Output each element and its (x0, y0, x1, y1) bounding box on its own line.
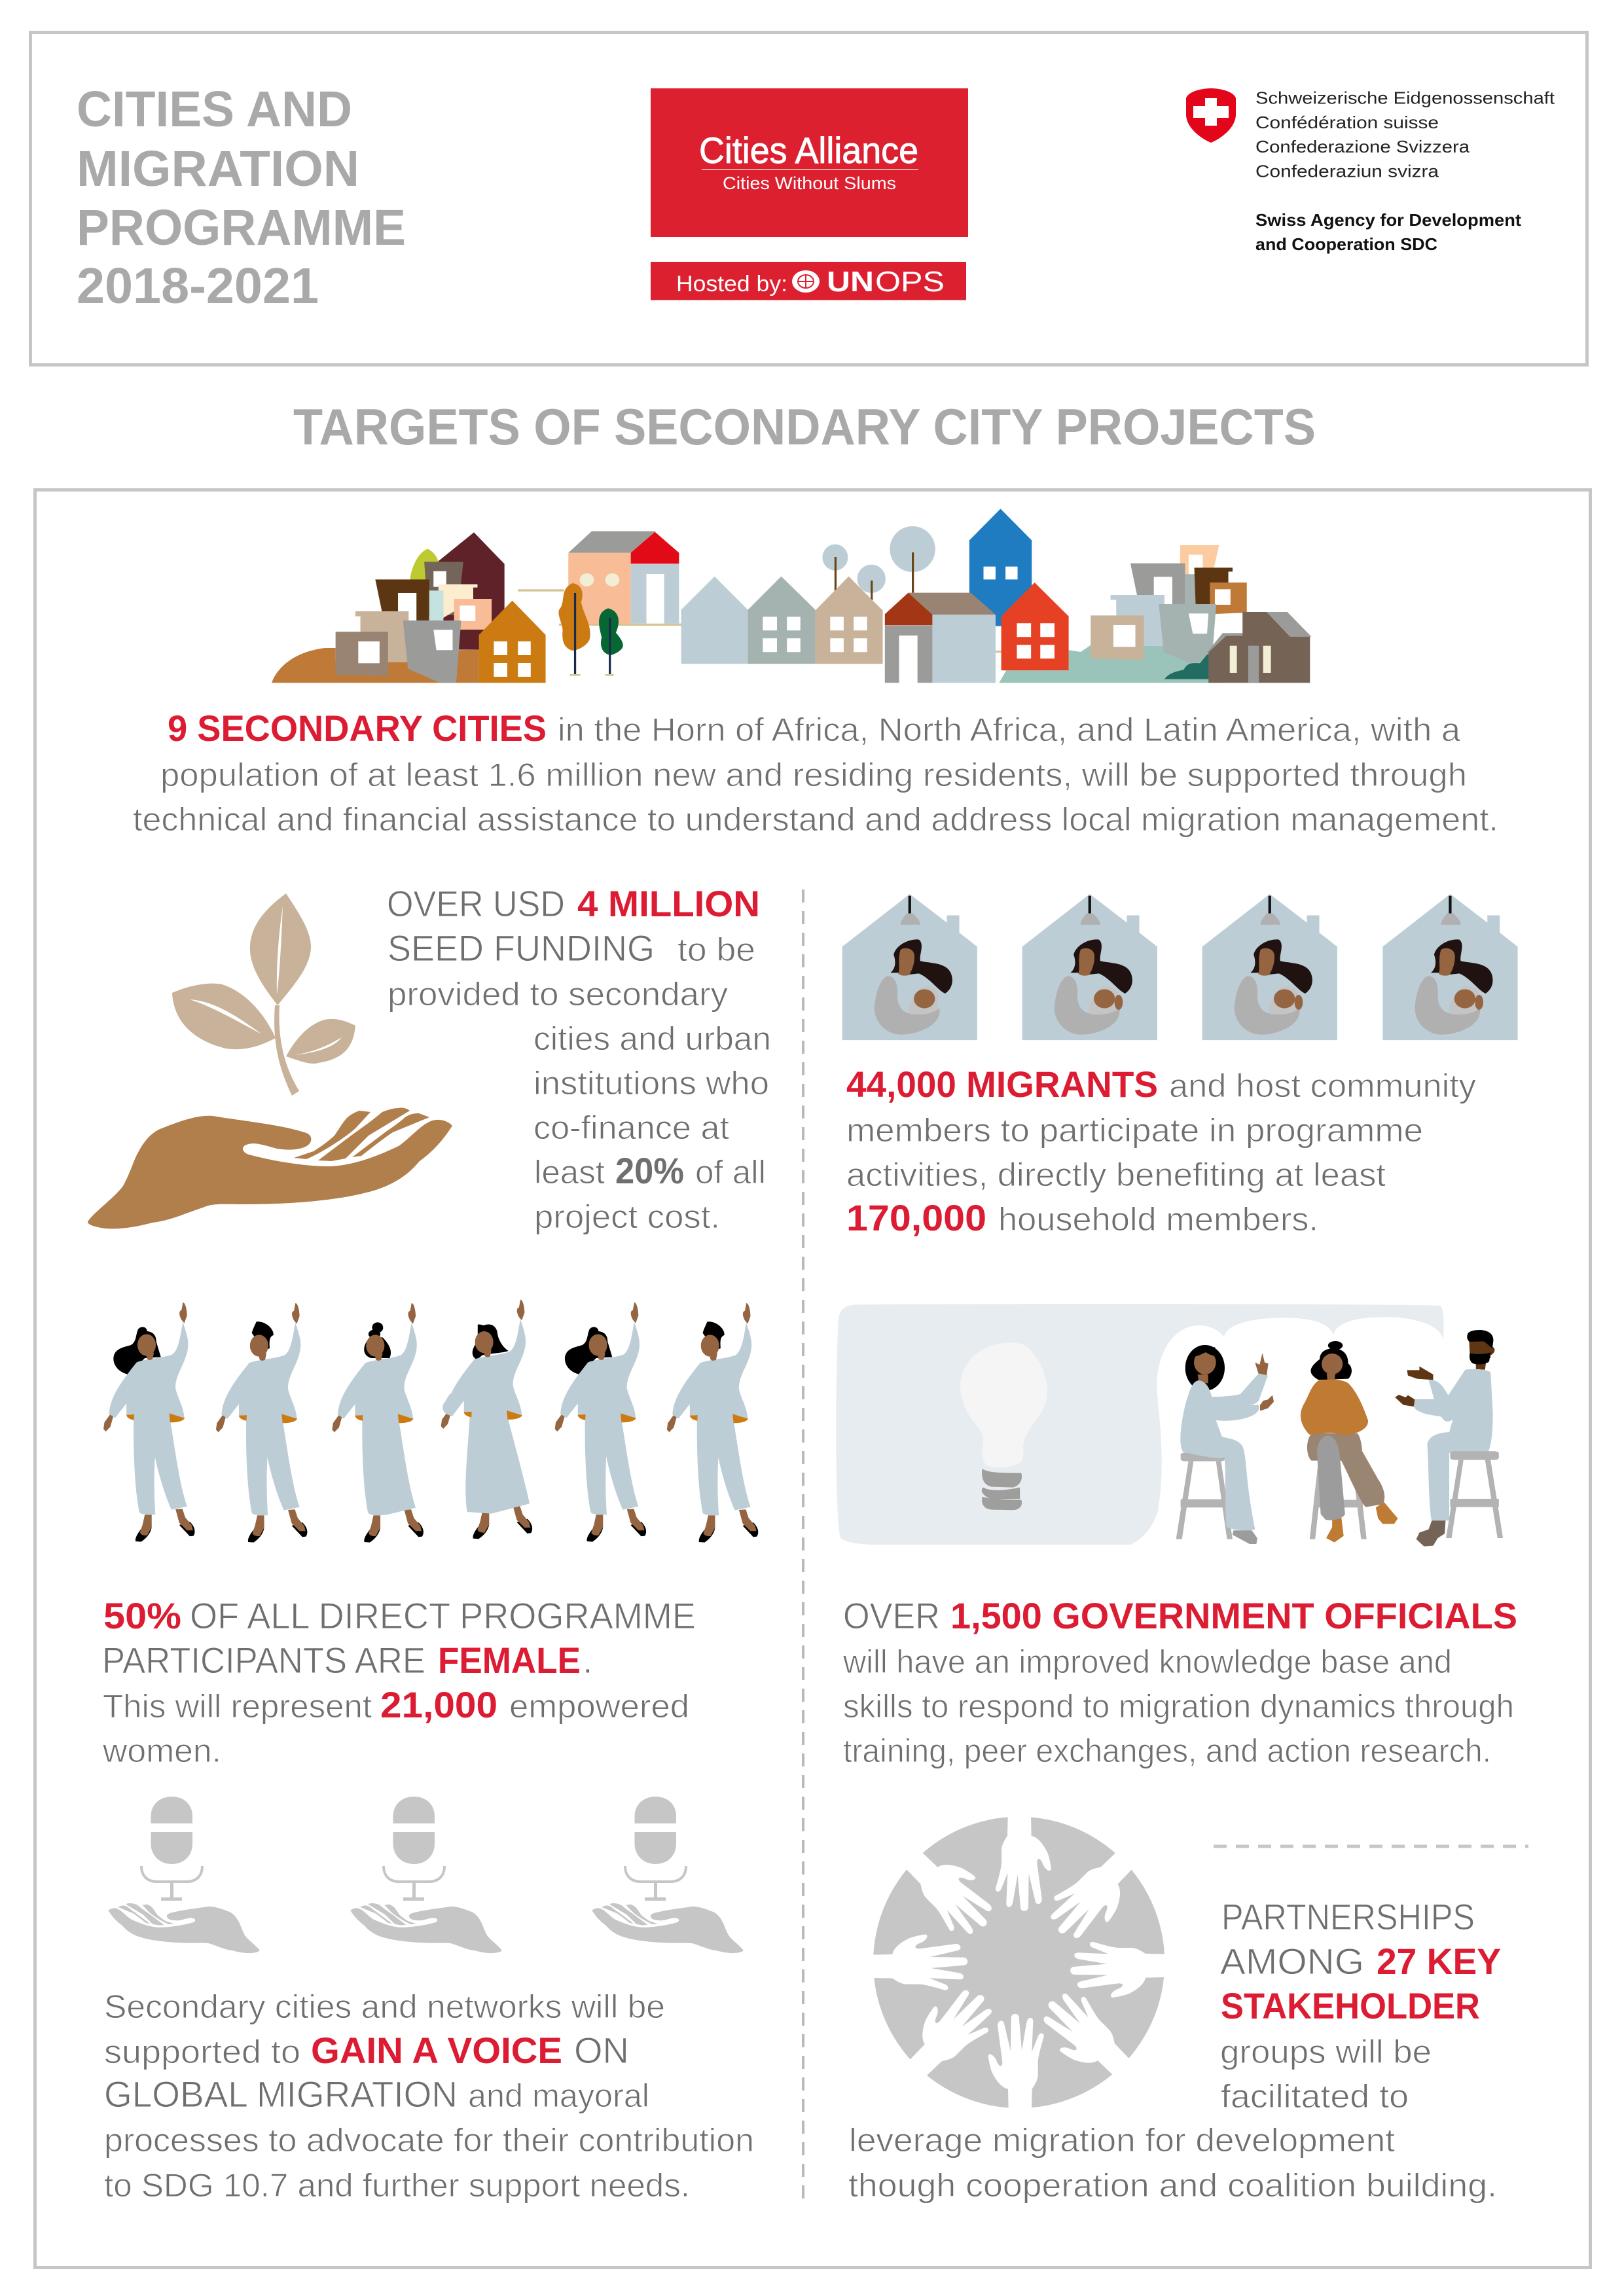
Swiss confederation text: Confederazione Svizzera (1255, 137, 1470, 156)
text: seed funding: of all (695, 1154, 766, 1191)
intro text: 9 secondary cities: 9 SECONDARY CITIES (168, 708, 547, 749)
text: migrants: and host community (1169, 1067, 1476, 1104)
programme title: PROGRAMME (77, 200, 406, 256)
text: seed funding: to be (677, 931, 755, 968)
text: female participants: This will represent (103, 1688, 372, 1725)
Swiss confederation text (1255, 88, 1555, 254)
text: partnerships: PARTNERSHIPS (1221, 1896, 1475, 1937)
text: migrants: members to participate in programme (846, 1112, 1423, 1149)
icons: microphones over hands (108, 1797, 744, 1953)
text: partnerships: STAKEHOLDER (1221, 1985, 1480, 2026)
text: partnerships: leverage migration for development (849, 2122, 1395, 2159)
figure: woman in orange sweater (1301, 1341, 1398, 1543)
text: gain a voice: GLOBAL MIGRATION (104, 2073, 458, 2115)
intro text: 9 secondary cities: population of at least 1.6 million new and residing residents, will be supported through (160, 757, 1467, 793)
text: government officials: training, peer exchanges, and action research. (843, 1732, 1491, 1769)
text: female participants: 50% (103, 1595, 181, 1636)
programme title: CITIES AND (77, 81, 352, 137)
text: gain a voice: GAIN A VOICE (311, 2030, 562, 2071)
text: migrants: activities, directly benefiting at least (846, 1157, 1386, 1193)
text: government officials: skills to respond to migration dynamics through (843, 1688, 1514, 1725)
text: gain a voice: processes to advocate for their contribution (104, 2122, 754, 2159)
illustration: city skyline (272, 509, 1311, 683)
icon: light bulb (960, 1343, 1047, 1510)
text: female participants: . (583, 1640, 593, 1681)
text: partnerships: facilitated to (1221, 2078, 1409, 2115)
intro text: 9 secondary cities (133, 708, 1498, 838)
text: gain a voice: ON (574, 2030, 629, 2071)
text: partnerships: 27 KEY (1377, 1941, 1501, 1982)
logo: Cities Alliance: Cities Alliance (699, 130, 918, 171)
icon: seedling (172, 893, 355, 1096)
Swiss confederation text: Confederaziun svizra (1255, 161, 1439, 181)
text: seed funding: OVER USD (387, 883, 565, 924)
text: female participants (102, 1595, 696, 1769)
logo: Cities Alliance: Cities Without Slums (723, 173, 896, 193)
programme title: MIGRATION (77, 141, 359, 197)
icon: circle of hands (863, 1806, 1175, 2119)
text: female participants: FEMALE (438, 1640, 581, 1681)
logo: hosted by UNOPS: UN (827, 266, 874, 298)
Swiss confederation text: Swiss Agency for Development (1255, 210, 1521, 230)
logo: Cities Alliance (651, 88, 968, 237)
text: seed funding (387, 883, 771, 1235)
programme title: 2018-2021 (77, 258, 319, 314)
text: partnerships (848, 1896, 1501, 2204)
text: seed funding: 4 MILLION (577, 883, 760, 924)
intro text: 9 secondary cities: in the Horn of Africa, North Africa, and Latin America, with a (558, 711, 1460, 748)
text: female participants: women. (102, 1732, 221, 1769)
text: migrants: 170,000 (846, 1197, 986, 1238)
main panel (35, 490, 1591, 2267)
text: gain a voice: and mayoral (468, 2077, 649, 2114)
Swiss confederation text: Schweizerische Eidgenossenschaft (1255, 88, 1555, 107)
text: seed funding: co-finance at (533, 1109, 729, 1146)
text: partnerships: AMONG (1220, 1941, 1364, 1982)
text: partnerships: groups will be (1220, 2034, 1432, 2070)
text: seed funding: 20% (615, 1150, 684, 1191)
logo: Swiss shield (1186, 88, 1236, 143)
text: seed funding: cities and urban (533, 1020, 771, 1057)
text: government officials: will have an improved knowledge base and (842, 1643, 1452, 1680)
section heading: TARGETS OF SECONDARY CITY PROJECTS (293, 398, 1316, 456)
icons: mothers with babies in houses (842, 894, 1518, 1040)
text: seed funding: project cost. (534, 1198, 720, 1235)
text: female participants: PARTICIPANTS ARE (102, 1640, 425, 1681)
text: female participants: 21,000 (380, 1684, 497, 1725)
text: gain a voice: supported to (104, 2034, 300, 2070)
header panel (30, 33, 1587, 365)
icon: open hand (88, 1107, 452, 1229)
text: seed funding: least (534, 1154, 605, 1191)
text: migrants (846, 1064, 1476, 1238)
text: female participants: OF ALL DIRECT PROGRAMME (190, 1595, 696, 1636)
logo: hosted by UNOPS (651, 262, 966, 300)
illustration: light bulb and three people talking (836, 1304, 1503, 1547)
text: gain a voice (104, 1988, 754, 2204)
illustration: six women with raised hands (103, 1300, 758, 1543)
text: seed funding: SEED FUNDING (388, 927, 655, 969)
logo: hosted by UNOPS: Hosted by: (676, 272, 787, 296)
text: government officials: 1,500 GOVERNMENT OFFICIALS (950, 1595, 1517, 1636)
text: gain a voice: Secondary cities and networks will be (104, 1988, 665, 2025)
figure: bearded man on stool (1395, 1330, 1503, 1547)
logo: hosted by UNOPS: OPS (875, 266, 945, 298)
text: government officials: OVER (843, 1595, 940, 1636)
text: migrants: 44,000 MIGRANTS (846, 1064, 1158, 1105)
intro text: 9 secondary cities: technical and financial assistance to understand and address local migration management. (133, 801, 1498, 838)
text: gain a voice: to SDG 10.7 and further support needs. (104, 2167, 690, 2204)
text: female participants: empowered (509, 1688, 689, 1725)
text: migrants: household members. (998, 1201, 1318, 1238)
text: seed funding: institutions who (533, 1065, 769, 1102)
text: government officials (842, 1595, 1517, 1769)
figure: woman on stool (1176, 1345, 1274, 1544)
Swiss confederation text: Confédération suisse (1255, 113, 1439, 132)
text: seed funding: provided to secondary (388, 976, 728, 1013)
programme title (77, 81, 406, 314)
Swiss confederation text: and Cooperation SDC (1255, 234, 1437, 254)
text: partnerships: though cooperation and coalition building. (848, 2167, 1497, 2204)
